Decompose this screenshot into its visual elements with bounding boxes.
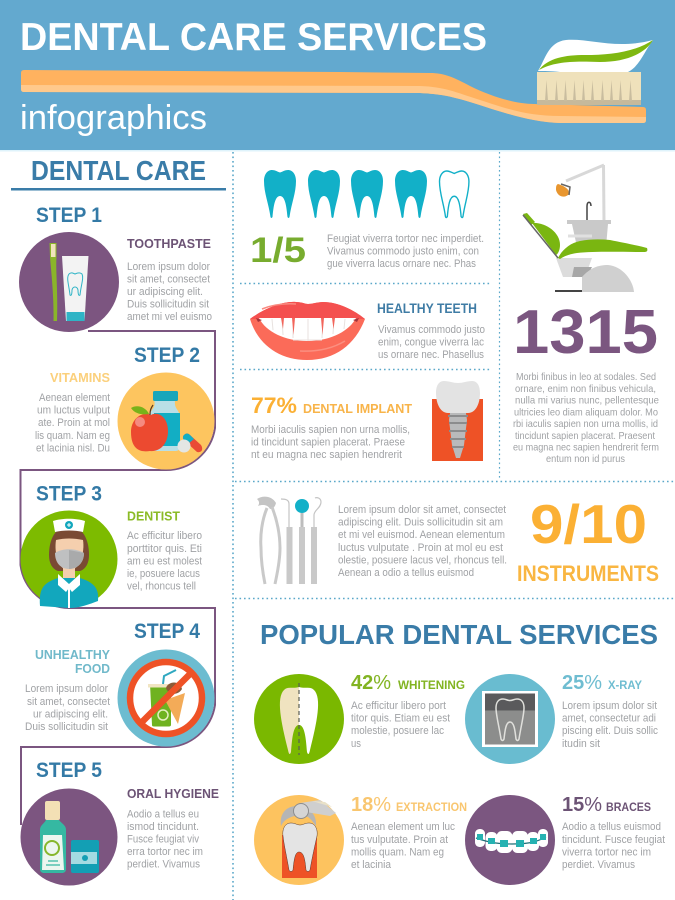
text block [562,700,658,750]
text block: lis quam. Nam eg [35,430,110,442]
text block: Vivamus commodo justo [378,324,485,336]
panel: dental care steps [11,155,226,886]
header banner [0,0,675,152]
icon: toothbrush and toothpaste [19,232,119,332]
icon: braces [465,795,555,885]
label: dental implant: DENTAL IMPLANT [303,401,412,416]
text block: titor quis. Etiam eu est [351,712,450,724]
text block: entum non id purus [546,453,625,465]
text block: Duis sollicitudin sit [127,298,209,310]
dotted dividers [233,152,675,900]
text block: Fusce feugiat viv [127,834,199,846]
text block: Aenean element [39,392,110,404]
text block: Lorem ipsum dolor sit amet, consectet [338,504,506,516]
icon: dental instruments [257,497,321,584]
panel: braces [465,794,665,885]
text block: Vivamus commodo justo enim, con [327,246,479,258]
subtitle: infographics [20,99,207,137]
step 2 [35,344,214,470]
text block [338,504,507,579]
stat: 42% whitening: 42% [351,672,391,694]
text block: enim, congue viverra lac [378,336,484,348]
text block: viverra tortor nec im [562,846,651,858]
text block: ie, posuere lacus [127,568,200,580]
stat: 25% x-ray: 25% [562,672,602,694]
icon: vitamins and apple [118,372,214,470]
text block: olestie, posuere lacus vel, rhoncus tell. [338,554,507,566]
text block: vel, rhoncus tell [127,580,196,592]
text block: Lorem ipsum dolor [127,261,210,273]
text block: id tincidunt sapien placerat. Praese [251,436,405,448]
stat: 42% whitening [351,672,465,694]
stat: 25% x-ray: X-RAY [608,678,642,692]
text block: gue viverra lacus ornare nec. Phas [327,258,476,270]
text block: Ac efficitur libero [127,530,202,542]
heading: dental care: DENTAL CARE [31,155,206,186]
text block: ultricies leo diam aliquam dolor. Mo [514,406,658,418]
text block [327,233,484,270]
stat: 15% braces: BRACES [606,800,651,814]
text block [513,371,659,465]
step 1 [19,204,212,332]
stat: 77%: 77% [251,393,297,418]
text block [35,392,110,454]
text block: Duis sollicitudin sit [25,721,108,733]
text block: ornare, enim non finibus vehicula, [515,383,656,395]
label: toothpaste: TOOTHPASTE [127,236,211,251]
icon: dental chair [523,165,647,292]
step 4: STEP 4 [134,620,200,643]
step 1: STEP 1 [36,204,102,227]
text block [127,808,203,870]
step connector line [20,331,215,825]
text block: Aenean a odio a tellus euismod [338,567,474,579]
title: DENTAL CARE SERVICES [20,16,487,59]
label: instruments: INSTRUMENTS [517,561,659,586]
stat: 25% x-ray [562,672,642,694]
label: unhealthy food [35,647,110,676]
panel: extraction [254,794,467,885]
text block: Morbi iaculis sapien non urna mollis, [251,424,410,436]
text block: Morbi finibus in leo at sodales. Sed [516,371,656,383]
icon: implant [432,381,483,461]
text block: Feugiat viverra tortor nec imperdiet. [327,233,484,245]
text block: rbi iaculis sapien non urna mollis, id [513,418,658,430]
text block [25,683,110,733]
icon: no unhealthy food [118,650,214,746]
step 3: STEP 3 [36,482,102,506]
text block [351,700,450,750]
step 2: STEP 2 [134,344,200,367]
text block [378,324,485,361]
text block: us [351,738,361,750]
stat: 9/10: 9/10 [530,493,647,555]
stat: 18% extraction: EXTRACTION [396,800,467,814]
icon: x-ray [465,674,555,764]
text block: amet, consectetur adi [562,712,656,724]
text block: luctus vulputate . Proin at mol eu est [338,542,503,554]
step 5 [20,759,219,886]
panel: one in five teeth [250,170,484,270]
text block: itudin sit [562,738,600,750]
text block [127,261,212,323]
text block: adipiscing elit. Duis sollicitudin sit am [338,516,503,528]
text block: Aodio a tellus eu [127,808,199,820]
text block: sit amet, consectet [27,696,110,708]
text block: amet mi vel euismo [127,311,212,323]
text block: ismod tincidunt. [127,821,199,833]
icon: dentist [20,510,118,608]
text block: et lacinia nisl. Du [36,442,110,454]
panel: healthy teeth [250,301,485,361]
panel: dental implant [251,381,483,461]
text block [127,530,202,592]
text block: piscing elit. Duis sollic [562,725,658,737]
text block: um luctus vulput [37,404,110,416]
stat: 18% extraction: 18% [351,794,391,816]
text block: sit amet, consectet [127,274,210,286]
stat: 18% extraction [351,794,467,816]
stat: 15% braces [562,794,651,816]
panel: whitening [254,672,465,764]
text block: Aodio a tellus euismod [562,821,661,833]
label: oral hygiene: ORAL HYGIENE [127,786,219,801]
label: healthy teeth: HEALTHY TEETH [377,301,477,316]
label: unhealthy food: UNHEALTHY [35,647,110,662]
label: vitamins: VITAMINS [50,370,110,385]
text block: perdiet. Vivamus [127,858,200,870]
heading: popular dental services: POPULAR DENTAL SERVICES [260,619,658,650]
icon: smile [250,302,365,360]
stat: 1/5: 1/5 [250,231,306,270]
text block: ur adipiscing elit. [127,286,203,298]
text block: erra tortor nec im [127,846,203,858]
text block: et lacinia [351,859,392,871]
step 5: STEP 5 [36,759,102,782]
icon: mouthwash and floss [20,788,118,886]
text block: nulla mi varius nunc, pellentesque [515,394,659,406]
stat: 15% braces: 15% [562,794,602,816]
text block: Lorem ipsum dolor sit [562,700,657,712]
panel: x-ray [465,672,658,764]
text block: ur adipiscing elit. [33,708,108,720]
text block: porttitor quis. Eti [127,543,202,555]
text block: am eu est molest [127,556,202,568]
text block: tincidunt sapien placerat. Praesent [515,430,655,442]
text block: nt eu magna nec sapien hendrerit [251,449,402,461]
text block: Lorem ipsum dolor [25,683,108,695]
label: dentist: DENTIST [127,508,180,524]
stat: 1315: 1315 [513,298,658,367]
text block: et mi vel euismod. Aenean elementum [338,529,505,541]
text block: Ac efficitur libero port [351,700,446,712]
text block [251,424,410,461]
icon: tooth whitening [254,674,344,764]
step 4 [25,620,214,746]
step 3 [20,482,202,608]
text block: Aenean element um luc [351,821,455,833]
stat: 42% whitening: WHITENING [398,678,465,692]
text block: perdiet. Vivamus [562,859,635,871]
text block [351,821,455,871]
icon: tooth extraction [254,795,344,885]
text block: tincidunt. Fusce feugiat [562,834,665,846]
panel: dental chair [513,165,659,465]
text block: mollis quam. Nam eg [351,846,444,858]
panel: instruments [257,493,659,586]
label: unhealthy food: FOOD [75,661,110,676]
text block: tus vulputate. Proin at [351,834,448,846]
text block: us ornare nec. Phasellus [378,349,484,361]
text block: ate. Proin at mol [38,417,110,429]
icon: toothbrush [21,40,653,123]
icon row: five teeth [264,170,469,218]
text block: molestie, posuere lac [351,725,444,737]
text block [562,821,665,871]
